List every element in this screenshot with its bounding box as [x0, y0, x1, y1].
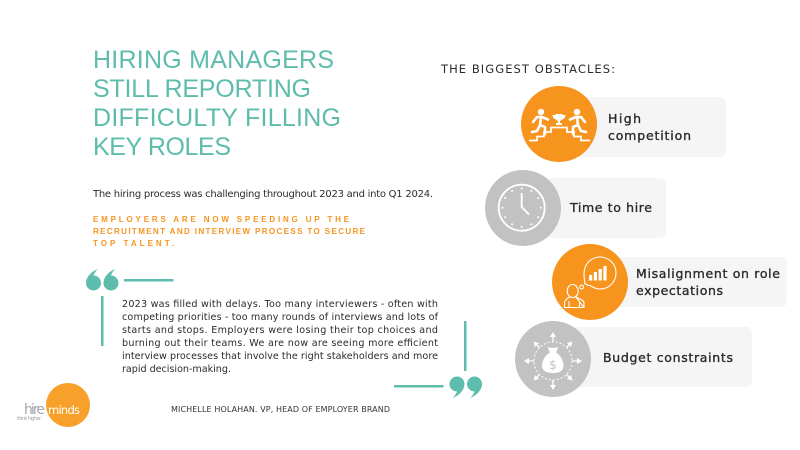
title: DIFFICULTY FILLING [93, 104, 341, 132]
intro text: The hiring process was challenging throughout 2023 and into Q1 2024. [92, 189, 433, 200]
quote text: interview processes that involve the right stakeholders and more [122, 351, 438, 362]
title: KEY ROLES [93, 133, 231, 161]
icon: money bag with arrows [524, 332, 582, 390]
orange highlighted statement: RECRUITMENT AND INTERVIEW PROCESS TO SECURE [93, 227, 366, 236]
quote text: competing priorities - too many rounds of interviews and lots of [122, 312, 439, 323]
icon: clock [499, 185, 545, 231]
quote text: burning out their teams. We are now are seeing more efficient [122, 338, 438, 349]
label: competition [608, 128, 691, 143]
quote text: rapid decision-making. [122, 364, 231, 375]
closing quotation mark [394, 321, 482, 398]
title: STILL REPORTING [93, 75, 311, 103]
label [608, 111, 691, 143]
label [636, 266, 780, 298]
obstacle: misalignment on role expectations [552, 244, 787, 320]
label: Budget constraints [603, 350, 733, 365]
hireminds logo: minds [48, 403, 80, 417]
orange highlighted statement [93, 215, 366, 248]
orange highlighted statement: EMPLOYERS ARE NOW SPEEDING UP THE [93, 215, 350, 224]
obstacles heading: THE BIGGEST OBSTACLES: [440, 62, 615, 76]
label: Misalignment on role [636, 266, 780, 281]
hireminds logo [17, 383, 90, 427]
obstacle: time to hire [485, 170, 666, 246]
title: HIRING MANAGERS [93, 46, 334, 74]
icon: money bag with arrows: $ [549, 358, 557, 372]
hireminds logo: think higher [17, 416, 42, 422]
hireminds logo: hire [24, 402, 45, 418]
title [93, 46, 341, 161]
obstacle: high competition [521, 86, 726, 162]
label: expectations [636, 283, 723, 298]
icon: person thinking of a chart [564, 257, 616, 308]
orange highlighted statement: TOP TALENT. [93, 239, 174, 248]
obstacle: budget constraints [515, 321, 752, 397]
quote text [122, 299, 439, 375]
label: Time to hire [569, 200, 652, 215]
quote attribution: MICHELLE HOLAHAN. VP, HEAD OF EMPLOYER BRAND [171, 405, 390, 414]
icon: competitors and trophy on stairs [529, 109, 590, 140]
label: High [608, 111, 641, 126]
quote text: starts and stops. Employers were losing their top choices and [122, 325, 438, 336]
opening quotation mark [86, 269, 174, 346]
quote text: 2023 was filled with delays. Too many interviewers - often with [122, 299, 438, 310]
